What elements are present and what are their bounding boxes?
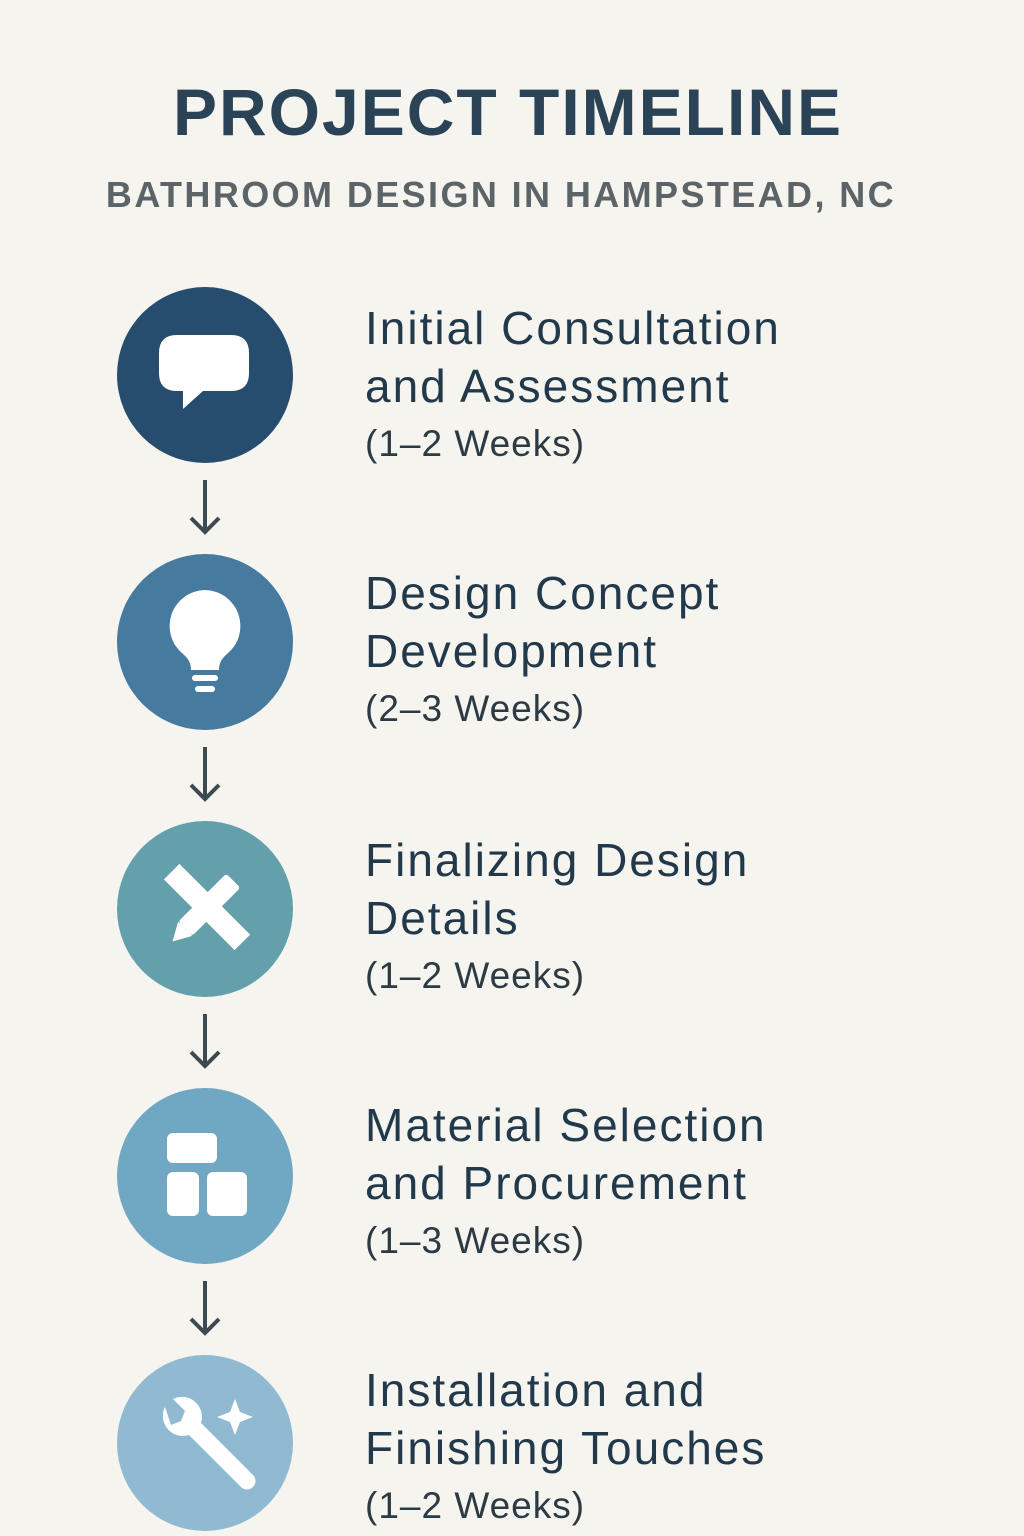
step 5 text: Installation and [365,1364,706,1416]
step 4 text: and Procurement [365,1157,748,1209]
step 2 text [365,567,720,729]
step 1 text: (1–2 Weeks) [365,423,585,464]
arrow 3 [190,1014,220,1069]
step 2 text: Development [365,625,658,677]
step 2 text: Design Concept [365,567,720,619]
arrow 1 [190,480,220,535]
step 3 text: Details [365,892,520,944]
step 3 text: (1–2 Weeks) [365,955,585,996]
step 3 text: Finalizing Design [365,834,749,886]
icon: material blocks [117,1088,293,1264]
step 3 text [365,834,749,996]
arrow 2 [190,747,220,802]
step 1 text: Initial Consultation [365,302,781,354]
icon: pencil and ruler [117,821,293,997]
step 5 text: Finishing Touches [365,1422,766,1474]
step 4 text [365,1099,767,1261]
title: PROJECT TIMELINE [173,75,843,149]
icon: wrench and sparkle [117,1355,293,1531]
step 1 text [365,302,781,464]
icon: chat bubble [117,287,293,463]
step 2 text: (2–3 Weeks) [365,688,585,729]
icon: light bulb [117,554,293,730]
step 1 text: and Assessment [365,360,731,412]
arrow 4 [190,1281,220,1336]
step 4 text: Material Selection [365,1099,767,1151]
step 4 text: (1–3 Weeks) [365,1220,585,1261]
step 5 text: (1–2 Weeks) [365,1485,585,1526]
step 5 text [365,1364,766,1526]
subtitle: BATHROOM DESIGN IN HAMPSTEAD, NC [106,174,896,215]
